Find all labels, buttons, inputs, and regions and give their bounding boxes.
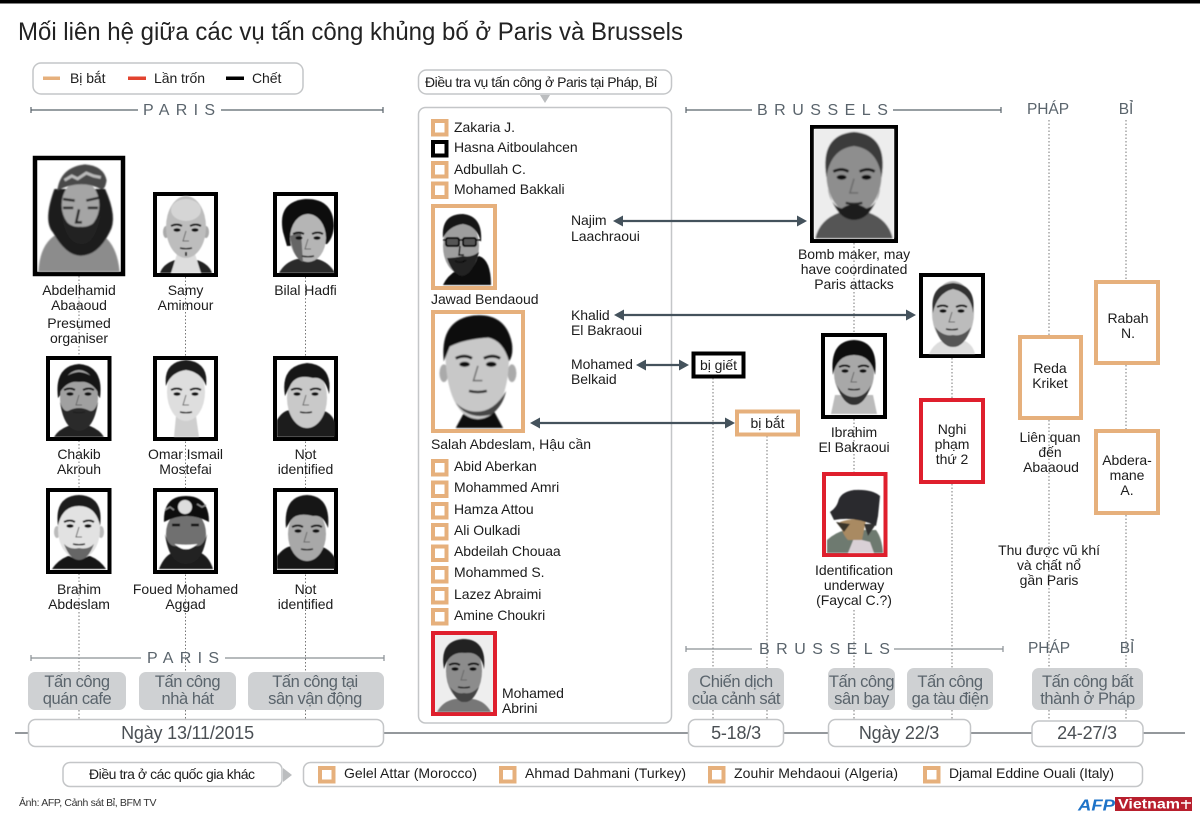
label: Abaaoud: Abdelhamid [42,282,116,298]
label: Mohamed Belkaid: Mohamed [571,356,633,372]
legend: Chết [252,70,282,86]
date: 13/11/2015: Ngày 13/11/2015 [121,723,254,743]
label: Mohamed Abrini: Abrini [502,700,538,716]
status box: killed: bị giết [700,357,737,373]
timeline axis [15,732,1185,734]
status box: killed [694,354,744,376]
title: Mối liên hệ giữa các vụ tấn công khủng bố ở Paris và Brussels [18,18,683,46]
label: Khalid El Bakraoui [571,307,642,338]
suspects list bottom: Abdeilah Chouaa [454,543,561,559]
box: Reda Kriket: Reda [1033,360,1067,376]
event: metro attack: ga tàu điện [912,690,989,708]
label: not identified (bottom) [278,581,333,612]
caption: weapons found: Thu được vũ khí [998,542,1100,558]
box: Abderamane A.: A. [1120,482,1134,498]
label: Bilal Hadfi: Bilal Hadfi [274,282,337,298]
portrait: Brahim Abdeslam [48,490,110,572]
label: Abaaoud: Presumed [47,315,111,331]
label: Foued Mohamed Aggad: Aggad [165,596,206,612]
caption: Najim [798,246,910,292]
label: Chakib Akrouh: Chakib [57,446,101,462]
box: Abderamane A.: Abdera- [1102,452,1152,468]
event: airport attack [828,668,895,710]
dotted connector lines [79,120,1126,721]
label: Mohamed Abrini [502,685,564,716]
caption: Reda Kriket: đến [1038,444,1062,460]
event: police operation: của cảnh sát [692,690,781,708]
suspects list bottom: Mohammed Amri [454,479,559,495]
header: Paris bottom range [31,650,384,667]
box: Rabah N.: N. [1121,325,1135,341]
header: Paris bottom range: PARIS [147,650,225,667]
box: Abderamane A.: mane [1110,467,1145,483]
suspects list bottom: Ali Oulkadi [454,522,520,538]
caption: Faycal C.: underway [824,577,884,593]
event: metro attack [907,668,993,710]
caption: Faycal C.: Identification [815,562,893,578]
label: not identified (top) [278,446,333,477]
event: theatre attack: nhà hát [162,690,214,708]
legend [33,63,303,94]
suspects list bottom: Lazez Abraimi [454,586,541,602]
portrait: Faycal C. CCTV [824,474,886,555]
legend: Lần trốn [154,70,205,86]
date: 24-27/3: 24-27/3 [1057,723,1117,743]
event: police operation [688,668,784,710]
label: Abaaoud: Abaaoud [51,297,107,313]
heading: other countries [63,762,292,786]
label: Mohamed Abrini: Mohamed [502,685,564,701]
header: Brussels range [686,102,1001,119]
suspects list bottom: Hamza Attou [454,501,534,517]
label: Samy Amimour: Amimour [158,297,214,313]
event: failed attack in France: thành ở Pháp [1040,690,1135,708]
label: Najim Laachraoui: Najim [571,212,607,228]
suspects list top [433,119,578,197]
box: Reda Kriket: Kriket [1032,375,1068,391]
caption: Reda Kriket: Abaaoud [1023,459,1079,475]
label: not identified (top): Not [295,446,316,462]
status box: arrested: bị bắt [751,415,785,431]
portrait: Mohamed Abrini [433,633,495,714]
label: Mohamed Belkaid [571,356,633,387]
date: 22/3 [828,720,970,746]
label: Ibrahim El Bakraoui [818,424,890,455]
suspects list bottom [433,458,561,624]
label: Jawad Bendaoud: Jawad Bendaoud [431,291,538,307]
header: Brussels bottom range [686,641,1003,658]
caption: Reda Kriket [1019,429,1081,475]
heading: other countries: Điều tra ở các quốc gia khác [89,766,255,782]
portrait: Chakib Akrouh [48,358,110,439]
status box: arrested [737,412,798,434]
portrait: Bilal Hadfi [275,194,336,275]
portrait: not identified (bottom) [275,490,336,572]
header: Belgium: BỈ [1119,101,1133,118]
header: France bottom: PHÁP [1028,640,1070,657]
panel: other countries list: Zouhir Mehdaoui (Algeria) [734,765,898,781]
box: second suspect: thứ 2 [936,451,968,467]
suspects list top: Adbullah C. [454,161,526,177]
arrow: Khalid [614,310,916,320]
event: airport attack: Tấn công [829,673,894,691]
portrait: Samy Amimour [155,194,216,275]
label: Najim Laachraoui: Laachraoui [571,228,640,244]
logo: AFP Vietnam [1077,796,1192,814]
event: cafe attack: quán cafe [43,690,111,708]
label: Omar Ismail Mostefai [148,446,223,477]
box: second suspect: Nghi [938,421,966,437]
label: Abaaoud: organiser [50,330,108,346]
arrow: Belkaid [636,360,689,370]
label: Salah Abdeslam: Salah Abdeslam, Hậu cần [431,436,591,452]
label: Brahim Abdeslam [48,581,110,612]
header: Brussels range: BRUSSELS [757,102,894,119]
header: France: PHÁP [1027,101,1069,118]
date: 24-27/3 [1032,721,1143,746]
arrow: Salah [530,418,735,428]
portrait: Salah Abdeslam [433,312,523,431]
header: Belgium bottom: BỈ [1120,640,1134,657]
caption: Faycal C.: (Faycal C.?) [816,592,892,608]
label: not identified (bottom): Not [295,581,316,597]
caption: Najim: Paris attacks [814,276,894,292]
label: Khalid El Bakraoui: El Bakraoui [571,322,642,338]
label: Brahim Abdeslam: Brahim [57,581,101,597]
label: Khalid El Bakraoui: Khalid [571,307,610,323]
suspects list bottom: Abid Aberkan [454,458,537,474]
date: 13/11/2015 [28,720,384,746]
suspects list top: Zakaria J. [454,119,515,135]
event: stadium attack: Tấn công tại [272,673,358,691]
heading: investigation panel [418,70,672,103]
panel: other countries list: Gelel Attar (Morocco) [344,765,477,781]
event: stadium attack: sân vận động [268,690,362,708]
suspects list top: Mohamed Bakkali [454,181,565,197]
portrait: Foued Mohamed Aggad [155,490,216,572]
caption: Najim: Bomb maker, may [798,246,910,262]
caption: weapons found: và chất nổ [1017,557,1081,573]
portrait: not identified (top) [275,358,336,439]
label: Foued Mohamed Aggad [133,581,238,612]
box: second suspect: phạm [935,436,969,452]
label: Brahim Abdeslam: Abdeslam [48,596,110,612]
date: 5-18/3: 5-18/3 [711,723,761,743]
box: Rabah N.: Rabah [1107,310,1149,326]
label: Samy Amimour: Samy [168,282,203,298]
caption: Faycal C. [815,562,893,608]
label: Foued Mohamed Aggad: Foued Mohamed [133,581,238,597]
caption: Reda Kriket: Liên quan [1019,429,1081,445]
panel: investigation list [418,108,672,723]
event: theatre attack: Tấn công [155,673,220,691]
suspects list bottom: Amine Choukri [454,607,545,623]
event: cafe attack [28,672,126,710]
caption: Najim: have coordinated [801,261,907,277]
box: Abderamane A. [1096,431,1158,513]
label: Chakib Akrouh [57,446,101,477]
box: second suspect [921,400,983,482]
top bar [0,0,1200,4]
event: stadium attack [248,672,384,710]
arrow: Najim [613,216,807,226]
header: Paris range [31,102,383,119]
caption: weapons found: gần Paris [1020,572,1078,588]
logo: AFP Vietnam: AFP [1077,798,1115,814]
event: metro attack: Tấn công [917,673,983,691]
panel: other countries list [304,762,1142,786]
event: failed attack in France [1032,668,1143,710]
label: Samy Amimour [158,282,214,313]
legend: Bị bắt [70,70,106,86]
date: 5-18/3 [688,720,784,746]
label: not identified (bottom): identified [278,596,333,612]
box: Rabah N. [1096,282,1158,363]
heading: investigation panel: Điều tra vụ tấn công ở Paris tại Pháp, Bỉ [425,74,658,90]
portrait: Ibrahim El Bakraoui [823,335,885,417]
panel: other countries list: Djamal Eddine Ouali (Italy) [949,765,1114,781]
box: Reda Kriket [1020,337,1081,418]
label: Ibrahim El Bakraoui: Ibrahim [831,424,877,440]
portrait: Najim Laachraoui [812,127,896,241]
header: Brussels bottom range: BRUSSELS [759,641,896,658]
logo: AFP Vietnam: Vietnam [1118,796,1180,812]
label: Ibrahim El Bakraoui: El Bakraoui [818,439,890,455]
portrait: Jawad Bendaoud [433,206,495,288]
label: not identified (top): identified [278,461,333,477]
header: Paris range: PARIS [143,102,221,119]
label: Abaaoud [42,282,116,346]
panel: other countries list: Ahmad Dahmani (Turkey) [525,765,686,781]
event: theatre attack [139,672,236,710]
event: airport attack: sân bay [834,690,890,708]
label: Chakib Akrouh: Akrouh [57,461,101,477]
portrait: Omar Ismail Mostefai [155,358,216,439]
caption: weapons found [998,542,1100,588]
portrait: Khalid El Bakraoui [921,275,983,356]
date: 22/3: Ngày 22/3 [859,723,939,743]
label: Mohamed Belkaid: Belkaid [571,371,617,387]
label: Najim Laachraoui [571,212,640,244]
suspects list top: Hasna Aitboulahcen [454,139,578,155]
event: cafe attack: Tấn công [44,673,110,691]
portrait: Abdelhamid Abaaoud [35,158,123,274]
label: Omar Ismail Mostefai: Mostefai [159,461,212,477]
event: failed attack in France: Tấn công bất [1042,673,1134,691]
label: Omar Ismail Mostefai: Omar Ismail [148,446,223,462]
event: police operation: Chiến dịch [699,673,773,691]
suspects list bottom: Mohammed S. [454,564,544,580]
source note: Ảnh: AFP, Cảnh sát Bỉ, BFM TV [19,796,156,809]
